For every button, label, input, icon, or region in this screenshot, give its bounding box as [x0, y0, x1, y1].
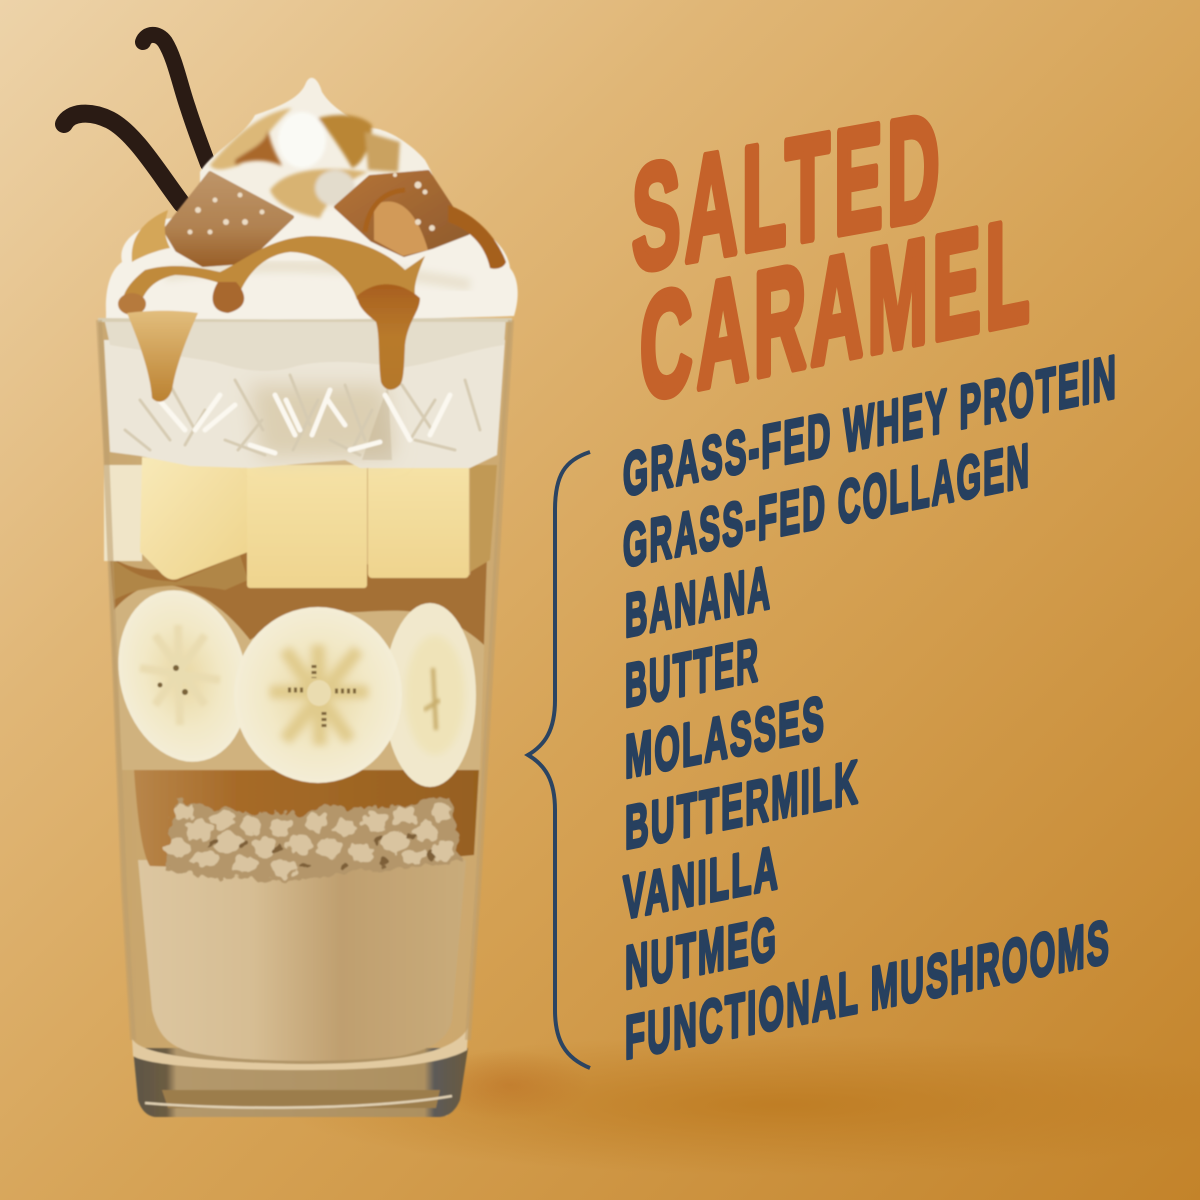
glass wall [98, 318, 512, 1116]
caramel drizzle [118, 205, 506, 402]
drizzle: long ribbon [123, 236, 425, 312]
ingredient: vanilla: VANILLA [623, 833, 780, 933]
banana slice: left [101, 576, 265, 776]
glass sides [99, 320, 511, 1040]
floor shadow [280, 1035, 1200, 1175]
ingredient: banana: BANANA [625, 553, 772, 651]
butter: middle [247, 465, 367, 588]
drizzle: left shoulder [132, 210, 170, 262]
lower caramel layer [133, 746, 480, 868]
drizzle: right stream [448, 205, 506, 269]
coconut shreds [125, 375, 480, 455]
upper caramel layer [110, 465, 490, 645]
base highlight [145, 1096, 452, 1108]
drip: left blob [118, 293, 146, 315]
banana slice: right [384, 603, 476, 787]
oats layer [165, 798, 460, 880]
base inner shade [162, 1090, 440, 1108]
cream backing behind bananas [112, 590, 486, 770]
icon: vanilla pods [64, 35, 208, 204]
butter: right [368, 465, 469, 578]
cream shading [165, 266, 470, 285]
rim highlight [98, 318, 512, 322]
butter: far left pale [104, 465, 142, 561]
caramel cube: right [336, 172, 468, 256]
milkshake glass [98, 78, 518, 1117]
glass rim band [104, 318, 506, 371]
drip: left triangle [127, 311, 198, 402]
caramel cube: left [165, 173, 292, 265]
coconut layer [104, 340, 505, 468]
top cream [200, 78, 440, 216]
top cream caramel shells [210, 108, 400, 218]
butter: left [140, 457, 248, 580]
caramel sliver right [470, 465, 497, 572]
butter cubes [104, 457, 497, 588]
base rim glass [132, 1028, 468, 1070]
banana slice: middle [234, 607, 402, 783]
banana slices [101, 576, 476, 787]
ingredients list: BUTTER [625, 626, 760, 721]
coconut glass shade [362, 385, 392, 460]
caramel light patch [112, 555, 248, 600]
glass base [133, 1048, 468, 1117]
cast shadow beside glass base [430, 1050, 590, 1120]
ingredients list [623, 343, 1118, 1073]
ingredient: molasses: MOLASSES [625, 683, 826, 792]
whipped cream [106, 204, 518, 319]
drip: middle blob [213, 282, 244, 313]
icon: curly brace [528, 452, 590, 1068]
drip: right long [357, 284, 420, 390]
ingredient: nutmeg: NUTMEG [625, 904, 778, 1003]
powder layer [138, 860, 466, 1061]
title [632, 81, 1034, 432]
coconut shade [250, 385, 395, 458]
ingredient: buttermilk: BUTTERMILK [625, 748, 860, 863]
caramel cubes [165, 172, 468, 265]
